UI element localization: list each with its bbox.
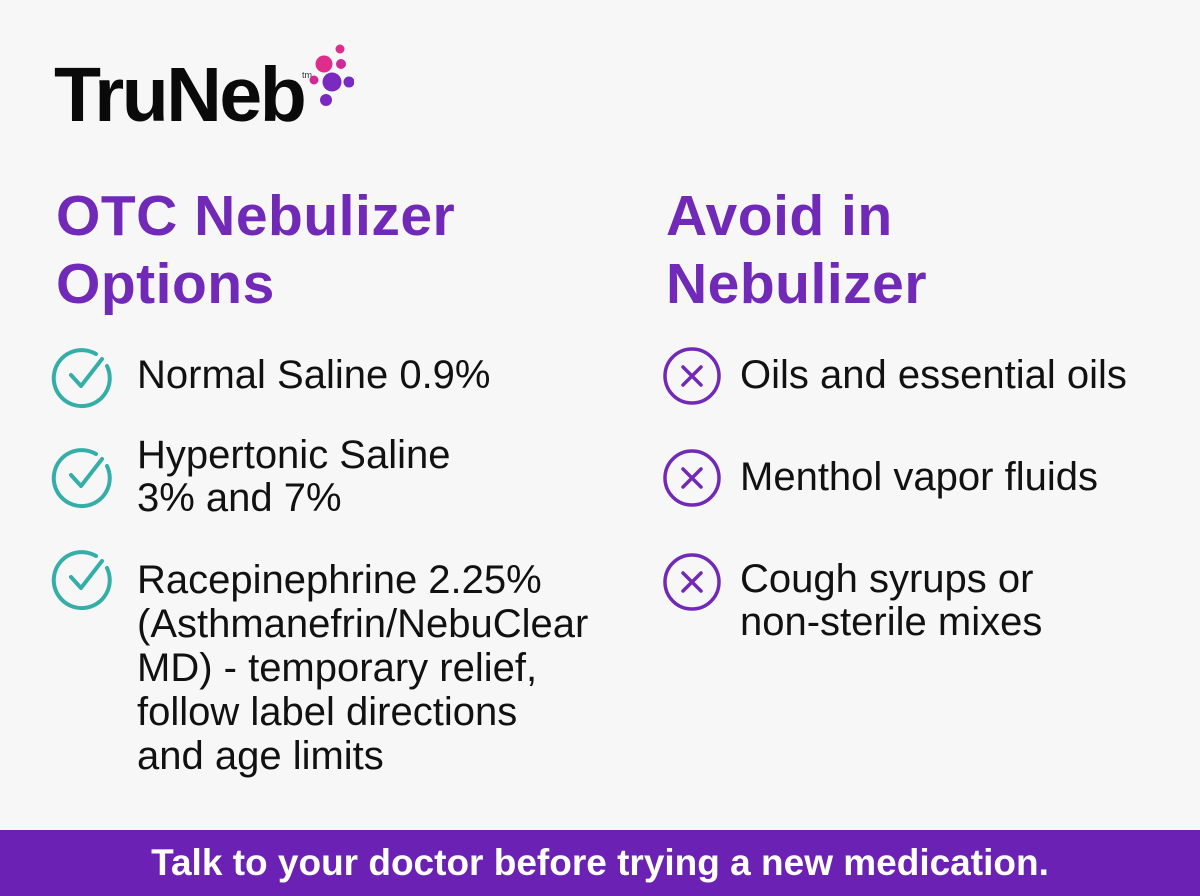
item: hypertonic saline: Hypertonic Saline xyxy=(137,433,450,477)
item: menthol xyxy=(663,449,1098,507)
item: menthol: Menthol vapor fluids xyxy=(740,455,1098,499)
item: racepinephrine: and age limits xyxy=(137,734,384,778)
heading: OTC options: Options xyxy=(56,252,275,316)
icon: check xyxy=(52,550,112,610)
item: normal saline: Normal Saline 0.9% xyxy=(137,353,490,397)
list: avoid xyxy=(663,347,1127,644)
icon: check xyxy=(52,448,112,508)
footer banner xyxy=(0,830,1200,896)
item: racepinephrine: follow label directions xyxy=(137,690,517,734)
item: oils xyxy=(663,347,1127,405)
heading: avoid: Nebulizer xyxy=(666,252,927,316)
logo: TruNeb xyxy=(54,52,304,138)
logo: tm xyxy=(302,70,312,80)
icon: check xyxy=(52,348,112,408)
item: cough syrups xyxy=(663,553,1042,644)
item: cough syrups: Cough syrups or xyxy=(740,557,1033,601)
heading: OTC options xyxy=(56,184,455,316)
icon: x xyxy=(663,347,721,405)
item: oils: Oils and essential oils xyxy=(740,353,1127,397)
heading: avoid xyxy=(666,184,927,316)
icon: x xyxy=(663,553,721,611)
list: OTC options xyxy=(52,348,588,778)
item: hypertonic saline xyxy=(52,433,450,520)
item: racepinephrine: Racepinephrine 2.25% xyxy=(137,558,542,602)
item: hypertonic saline: 3% and 7% xyxy=(137,476,342,520)
item: normal saline xyxy=(52,348,490,408)
item: cough syrups: non-sterile mixes xyxy=(740,600,1042,644)
icon: x xyxy=(663,449,721,507)
heading: avoid: Avoid in xyxy=(666,184,893,248)
item: racepinephrine xyxy=(52,550,588,778)
footer banner: Talk to your doctor before trying a new medication. xyxy=(151,842,1049,883)
item: racepinephrine: MD) - temporary relief, xyxy=(137,646,537,690)
item: racepinephrine: (Asthmanefrin/NebuClear xyxy=(137,602,588,646)
heading: OTC options: OTC Nebulizer xyxy=(56,184,455,248)
